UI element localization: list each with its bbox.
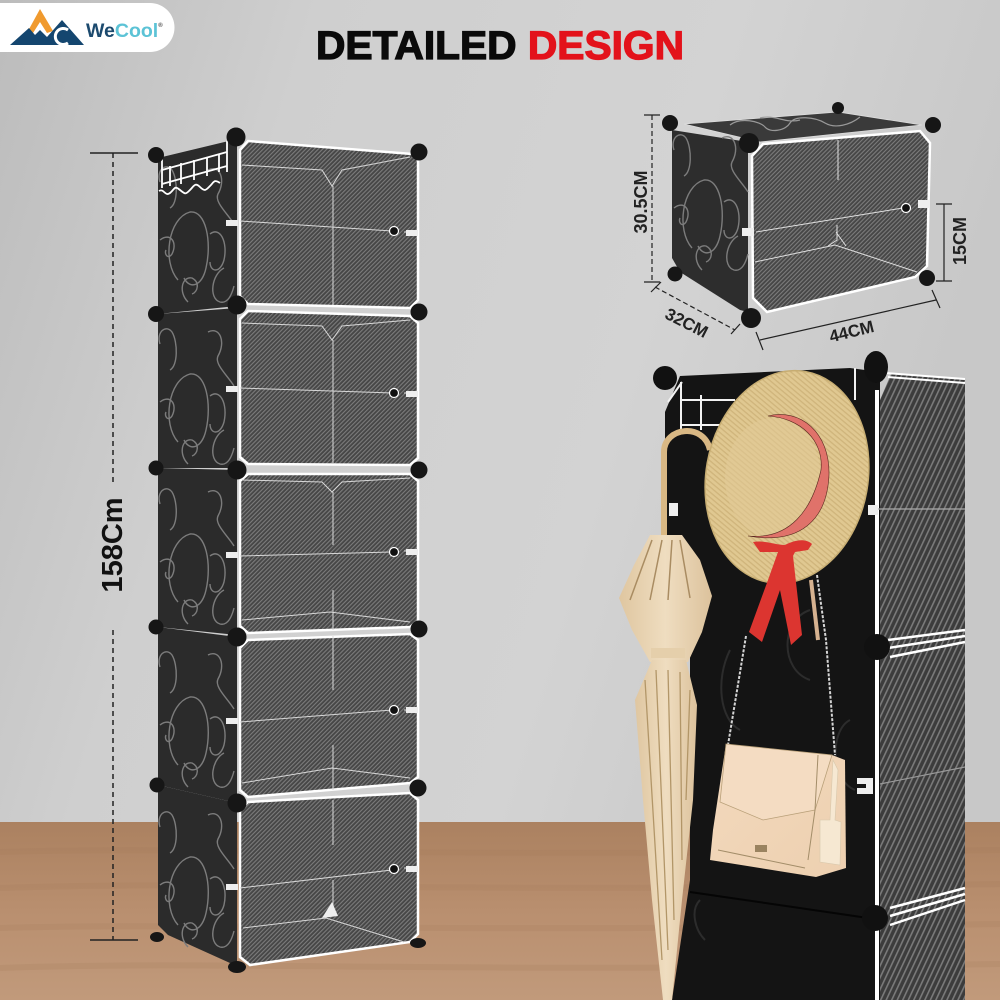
umbrella canopy body	[635, 660, 697, 1000]
logo badge	[0, 3, 174, 52]
title: DETAILED DESIGN	[316, 24, 684, 68]
cube side panel	[672, 130, 748, 312]
umbrella lower pleats	[645, 670, 690, 960]
cube panel 2	[226, 311, 418, 465]
cube panel 1	[226, 141, 418, 308]
cube panel 5	[226, 793, 418, 965]
close-up faint swirl shapes	[695, 610, 855, 940]
icon: mountain logo	[10, 9, 84, 45]
close-up black back panel	[665, 368, 880, 1000]
cube top panel	[684, 112, 922, 142]
red ribbon	[749, 540, 812, 645]
close-up panel seam	[690, 892, 868, 918]
umbrella	[619, 431, 712, 1000]
straw hat	[689, 358, 885, 645]
cube top swirl pattern	[730, 117, 860, 130]
dimension 15CM: 15CM	[950, 217, 970, 265]
brand name: WeCool	[86, 20, 158, 42]
umbrella handle	[664, 431, 710, 535]
umbrella strap	[651, 648, 685, 658]
dimension 15CM	[936, 204, 970, 281]
single cube with dimensions	[631, 102, 970, 350]
dimension 44CM: 44CM	[827, 317, 876, 346]
close-up organizer	[653, 351, 965, 1000]
dimension 44CM	[756, 290, 940, 350]
close-up connectors	[653, 351, 890, 931]
tower organizer	[148, 128, 428, 973]
bag plate	[755, 845, 767, 852]
height dimension 158Cm: 158Cm	[97, 497, 129, 593]
cube side swirl pattern	[673, 135, 748, 270]
wire grid hook rack	[159, 141, 227, 194]
umbrella pleats	[630, 540, 690, 600]
bag flap	[720, 744, 832, 820]
hat band	[748, 414, 829, 538]
bag strap	[811, 580, 818, 640]
hat brim	[689, 358, 885, 596]
dimension 30.5CM	[631, 115, 660, 282]
bag chains	[728, 575, 835, 755]
bag side seam	[718, 755, 818, 868]
cube connectors	[662, 102, 941, 328]
umbrella canopy top	[619, 535, 712, 662]
bag tag	[820, 760, 841, 865]
dimension 32CM	[651, 282, 740, 342]
hat crown	[725, 418, 821, 538]
brand name: ®	[158, 22, 163, 29]
close-up front panels	[669, 373, 965, 1000]
handbag	[710, 575, 846, 877]
close-up wire grid	[668, 368, 855, 430]
bag body	[710, 744, 846, 877]
height dimension 158Cm	[90, 153, 138, 940]
cube panel 4	[226, 634, 418, 797]
dimension 32CM: 32CM	[662, 304, 711, 342]
side panels of tower	[158, 139, 237, 965]
cube panel 3	[226, 474, 418, 633]
dimension 30.5CM: 30.5CM	[631, 170, 651, 234]
cube front panel	[742, 131, 930, 312]
wooden floor	[0, 822, 1000, 1000]
connectors of tower	[148, 128, 428, 973]
